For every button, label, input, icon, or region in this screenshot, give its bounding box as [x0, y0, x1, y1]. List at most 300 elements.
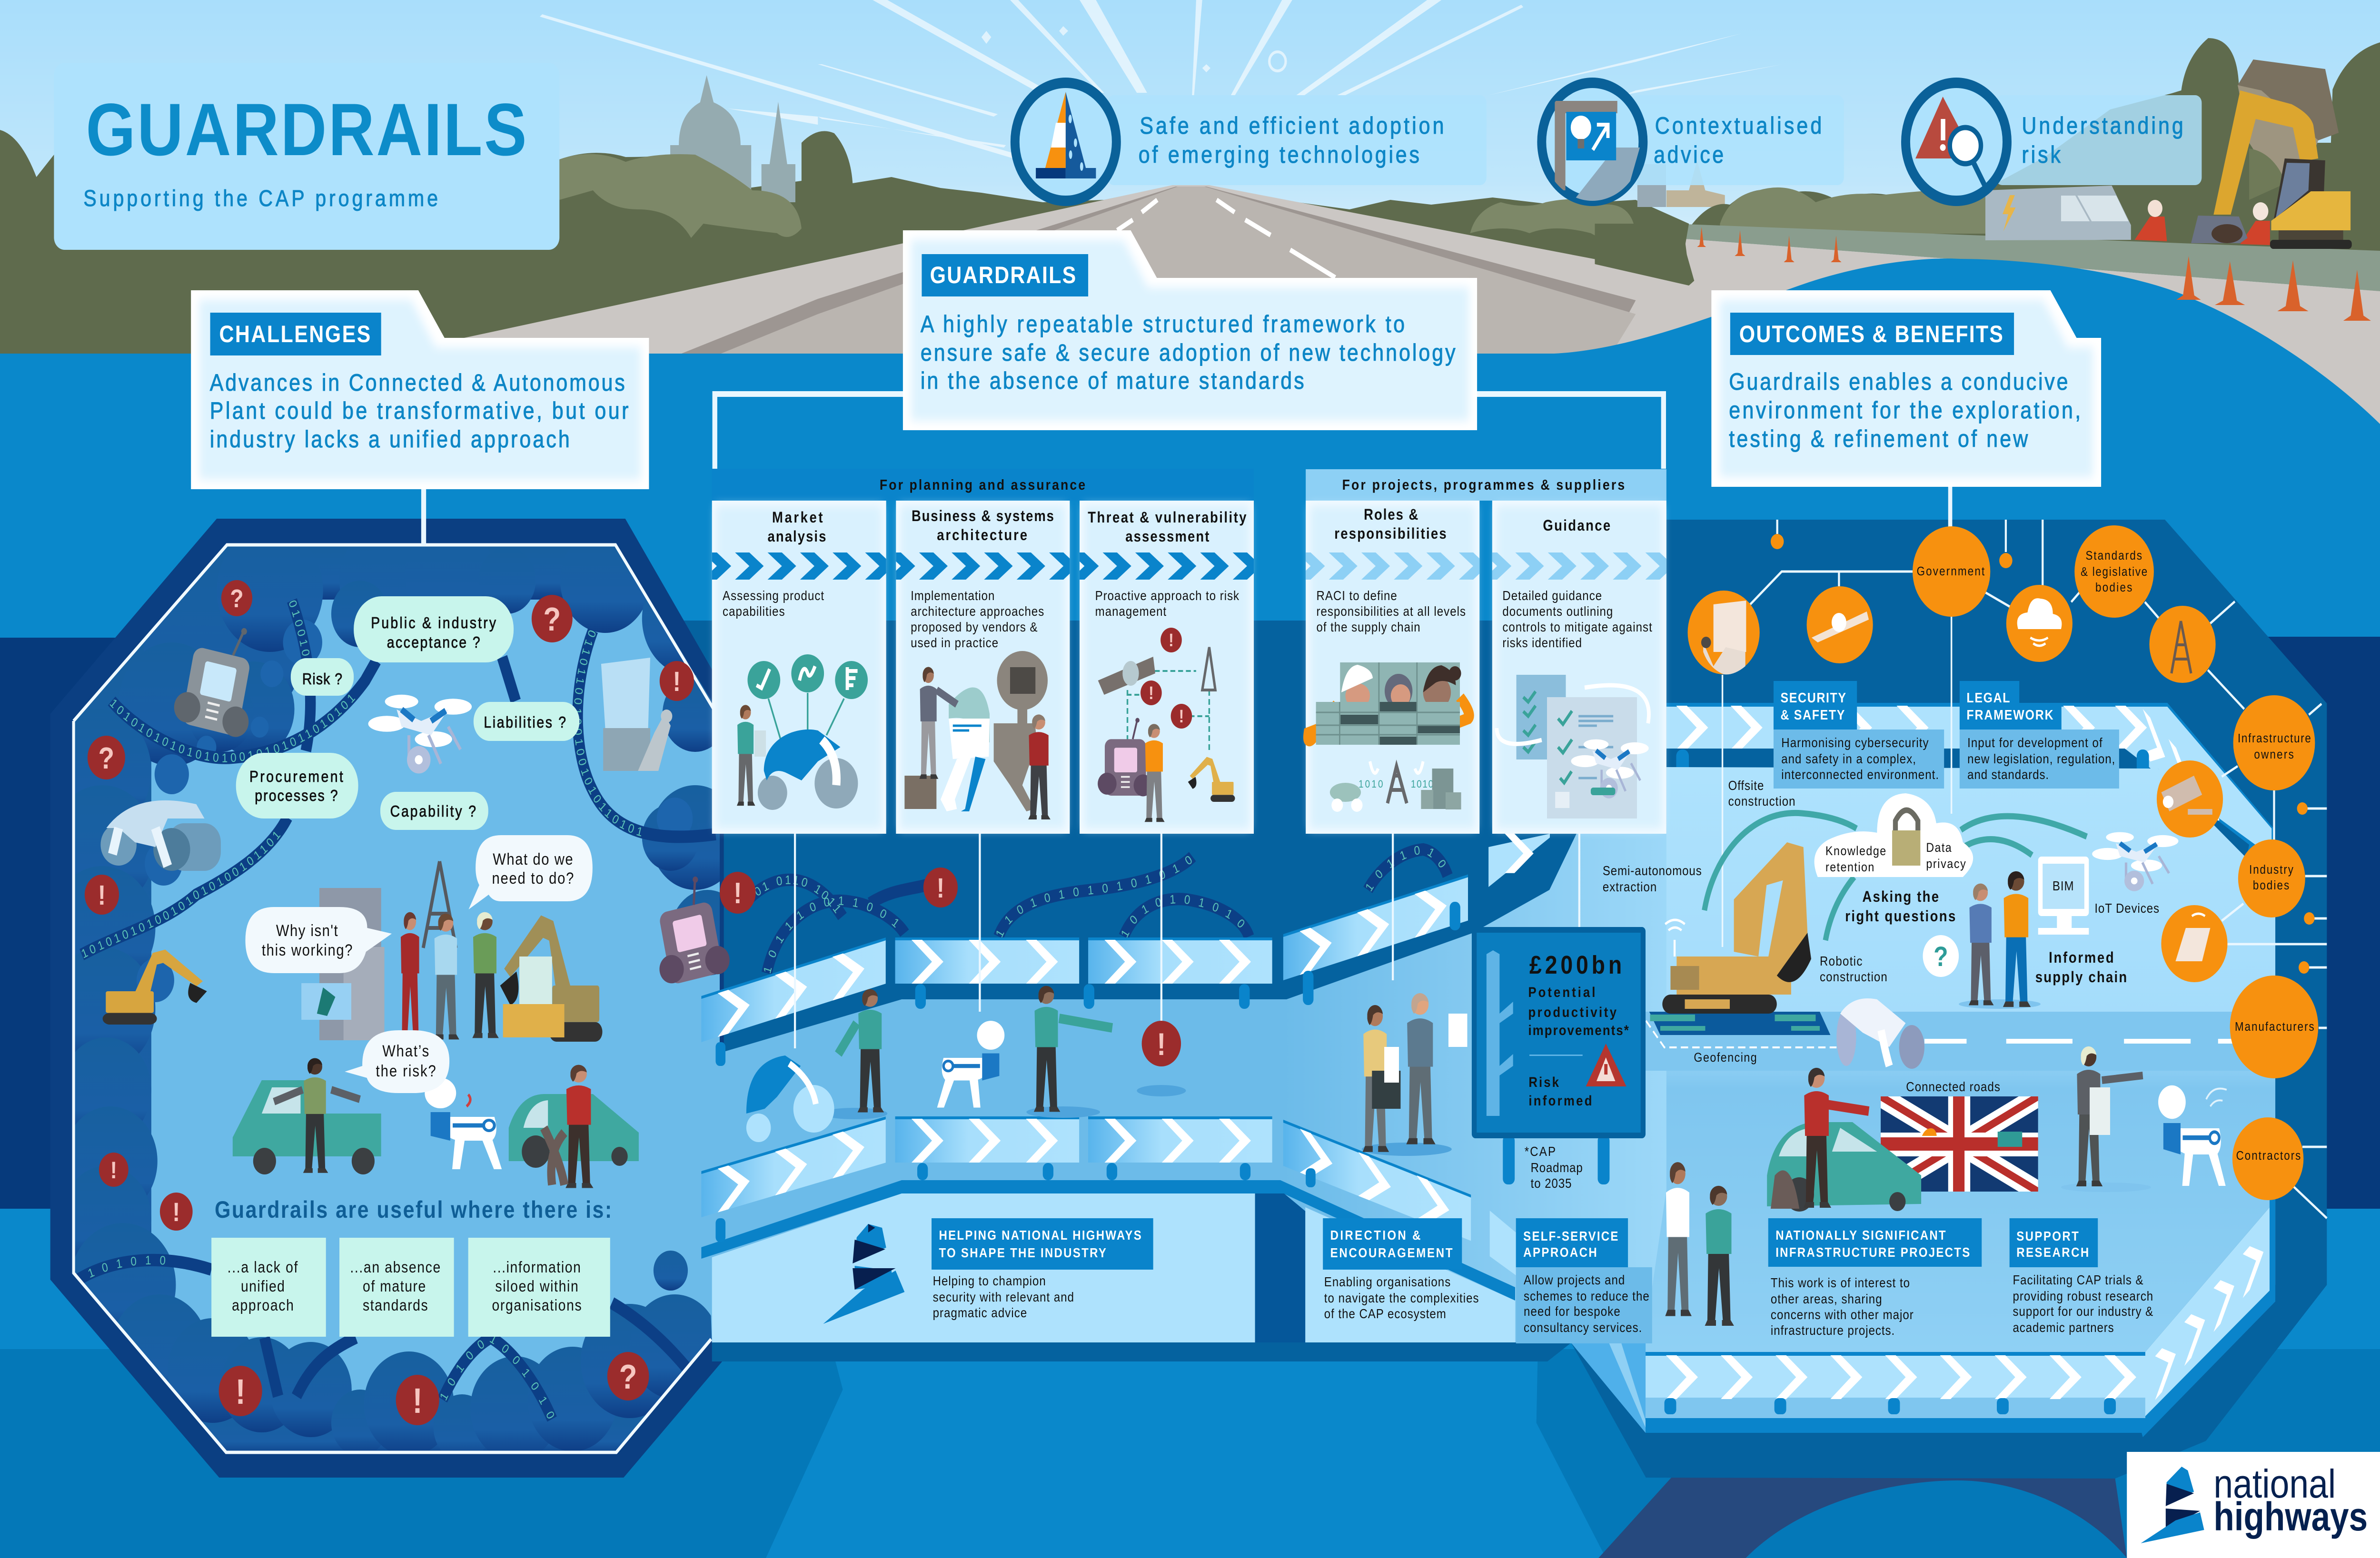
icon: question bubble: ?: [1934, 942, 1948, 972]
callout: safe and efficient adoption: Safe and efficient adoption: [1140, 112, 1444, 139]
card: market analysis: analysis: [768, 528, 826, 545]
bubble: procurement: [236, 753, 358, 818]
icon: alert centre one: [720, 872, 756, 914]
node: standards: Standards: [2085, 549, 2142, 562]
icon: alert left: !: [98, 880, 106, 911]
node: tablet: [2161, 905, 2228, 982]
text: challenges: Advances in Connected & Autonomous: [210, 369, 625, 396]
house: [2238, 59, 2339, 200]
icon: warning triangle: [1586, 1044, 1626, 1086]
cloud with padlock: Data: [1926, 840, 1952, 855]
heading: informed supply chain: [2035, 949, 2127, 986]
card: roles and responsibilities: responsibilities: [1334, 525, 1447, 542]
sign: 200bn: productivity: [1528, 1004, 1616, 1020]
label: IoT devices: IoT Devices: [2094, 900, 2159, 916]
bubble: liabilities: [474, 702, 579, 741]
speech: what do we need to do: [469, 835, 593, 909]
warning icons: [85, 580, 1186, 1425]
tag: nationally significant infrastructure projects: NATIONALLY SIGNIFICANT: [1775, 1227, 1946, 1242]
binary text: 0100100: [286, 598, 314, 671]
bubble: public acceptance: [354, 596, 514, 662]
icon: alert: [660, 661, 694, 701]
St Paul's dome: [670, 75, 795, 202]
heading: outcomes: OUTCOMES & BENEFITS: [1739, 321, 2003, 347]
node: cloud: [2006, 585, 2073, 662]
tag: legal framework: [1960, 681, 2119, 789]
illustration: RACI: [1308, 662, 1469, 812]
label: semi-autonomous extraction: [1603, 863, 1702, 894]
tag: legal framework: LEGAL: [1966, 690, 2010, 705]
node: CCTV: [2157, 760, 2223, 838]
speech: why isn't this working: this working?: [262, 941, 353, 959]
card: threat and vulnerability assessment: management: [1095, 603, 1167, 619]
text: helping: pragmatic advice: [933, 1305, 1027, 1320]
binary text: 10101010100101010100101101: [79, 826, 285, 961]
icon: alert left lower: !: [110, 1157, 117, 1183]
box: absence of mature standards: ...an absence: [350, 1258, 440, 1276]
text: CAP roadmap note: Roadmap: [1531, 1160, 1583, 1175]
illustration: centre figures: [746, 986, 1112, 1142]
octagon frame: [50, 519, 724, 1478]
bubble: capability: [380, 792, 488, 830]
lighter foliage left: [559, 154, 802, 238]
label: robotic construction: construction: [1820, 969, 1887, 984]
cones large: [2176, 256, 2371, 321]
text: challenges: [210, 369, 628, 453]
card: market analysis: [712, 501, 886, 834]
text: nationally significant: concerns with other major: [1771, 1307, 1914, 1322]
panel: direction and encouragement: to navigate the complexities: [1324, 1290, 1479, 1305]
illustration: RACI: 1010: [1359, 779, 1383, 790]
tag: helping: HELPING NATIONAL HIGHWAYS: [939, 1227, 1141, 1242]
tag: nationally significant infrastructure projects: INFRASTRUCTURE PROJECTS: [1775, 1244, 1970, 1260]
van: [1985, 186, 2131, 240]
card: roles and responsibilities: RACI to define: [1316, 588, 1397, 603]
binary text: 011011001001001010110101: [571, 628, 646, 840]
icon: question left: [88, 736, 125, 779]
card: business and systems architecture: Implementation: [911, 588, 994, 603]
panel: self-service approach: schemes to reduce the: [1524, 1288, 1649, 1303]
tag: security and safety: SECURITY: [1781, 690, 1846, 705]
panel: self-service approach: consultancy services.: [1524, 1320, 1642, 1335]
text: support research: providing robust research: [2013, 1288, 2153, 1303]
text: support research: [2013, 1272, 2153, 1335]
heading: guardrails: GUARDRAILS: [930, 262, 1076, 288]
road and shoulders: [409, 185, 2380, 457]
text: CAP roadmap note: *CAP: [1525, 1144, 1556, 1159]
icon: alert heading: !: [172, 1198, 180, 1227]
node: tower: [2149, 606, 2216, 683]
card: business and systems architecture: used in practice: [911, 635, 998, 650]
illustration: union flag: [1881, 1096, 2038, 1192]
text: guardrails: A highly repeatable structured framework to: [921, 311, 1405, 337]
card: business and systems architecture: proposed by vendors &: [911, 619, 1038, 634]
icon: alert left lower: [99, 1153, 129, 1187]
illustration: guidance documents: [1497, 675, 1649, 818]
icon: national highways mark: [823, 1224, 904, 1324]
icon: question left: ?: [99, 741, 114, 775]
title box: [54, 63, 559, 250]
card: threat and vulnerability assessment: Threat & vulnerability: [1088, 509, 1247, 526]
trees left: [0, 130, 1172, 355]
illustration: BIM screen and people: BIM: [2053, 878, 2074, 893]
icon: remote control: [171, 615, 265, 740]
tag: security and safety: Harmonising cybersecurity: [1781, 735, 1929, 750]
cloud with padlock: [1815, 793, 1973, 877]
icon: control station: [601, 658, 672, 771]
panel: self-service approach: SELF-SERVICE: [1523, 1228, 1618, 1243]
text: challenges: industry lacks a unified approach: [210, 426, 570, 453]
card: market analysis: Assessing product: [723, 588, 824, 603]
cloud with padlock: retention: [1825, 860, 1874, 874]
icon: question: ?: [230, 584, 244, 613]
node: standards: [2074, 525, 2154, 618]
roadworkers: [2135, 200, 2270, 245]
text: outcomes: Guardrails enables a conducive: [1729, 368, 2068, 395]
illustration: robot dog and woman with car: [425, 1065, 639, 1188]
icon: question bottom: ?: [619, 1358, 637, 1396]
navy side bands: [0, 637, 2380, 1209]
panel: guardrails intro: [903, 230, 1477, 430]
illustration: architecture: [904, 651, 1051, 819]
box: absence of mature standards: of mature: [363, 1277, 426, 1295]
octagon interior: [75, 546, 720, 1450]
icon: alert: !: [673, 667, 681, 697]
bubble: capability: Capability ?: [390, 802, 476, 820]
tag: legal framework: and standards.: [1967, 767, 2049, 782]
heading: asking the right questions: Asking the: [1862, 888, 1939, 906]
distant buildings: [1637, 160, 1725, 207]
bubble: risk: Risk ?: [302, 670, 342, 688]
node: infrastructure owners: [2233, 695, 2315, 790]
node: manufacturers: [2230, 976, 2318, 1078]
speech: what do we need to do: need to do?: [492, 869, 574, 887]
heading: challenges: CHALLENGES: [219, 321, 370, 347]
box: absence of mature standards: standards: [363, 1296, 428, 1314]
callout: understanding risk: Understanding: [2022, 112, 2183, 139]
callout: safe and efficient adoption: [1015, 83, 1487, 201]
speech: what's the risk: What’s: [382, 1042, 429, 1060]
heading: informed supply chain: supply chain: [2035, 969, 2127, 986]
icon: autonomous roller: [100, 800, 221, 871]
cloud with padlock: Knowledge: [1825, 844, 1886, 858]
illustration: two men talking: [1665, 1162, 1734, 1326]
card: threat and vulnerability assessment: assessment: [1125, 528, 1209, 545]
icon: alert bottom one: [219, 1366, 262, 1416]
icon: drone IoT: [2092, 832, 2178, 891]
panel: self-service approach: [1516, 1218, 1652, 1343]
icon: alert centre one: !: [734, 877, 742, 910]
panel: challenges intro: [191, 290, 649, 489]
small nodes: [1771, 534, 2315, 974]
label: connected roads: Connected roads: [1906, 1079, 2000, 1094]
illustration: woman with car: [1767, 1068, 1921, 1212]
node: infrastructure owners: Infrastructure: [2238, 731, 2311, 745]
trees right: [1689, 38, 2380, 257]
digital road: [1643, 1012, 2275, 1071]
card: market analysis: Market: [772, 509, 823, 526]
text: challenges: Plant could be transformative, but our: [210, 397, 628, 424]
text: nationally significant: This work is of interest to: [1771, 1275, 1910, 1290]
icon: drone: [368, 695, 472, 773]
text: outcomes: environment for the exploration,: [1729, 397, 2081, 424]
panel: direction and encouragement: DIRECTION &: [1330, 1227, 1421, 1242]
sign: 200bn: informed: [1528, 1093, 1592, 1108]
box: information siloed: [468, 1238, 610, 1337]
card: roles and responsibilities: responsibilities at all levels: [1316, 603, 1466, 619]
text: helping: Helping to champion: [933, 1273, 1046, 1288]
icon: risk magnifier: [1905, 83, 2007, 201]
panel: self-service approach: need for bespoke: [1524, 1303, 1620, 1319]
icon: alert heading: [160, 1193, 193, 1231]
centre dark zone: [614, 621, 1758, 1096]
speech: what's the risk: [345, 1030, 449, 1093]
card: roles and responsibilities: of the supply chain: [1316, 619, 1420, 634]
illustration: threat: !: [1169, 630, 1174, 651]
icon: small excavator: [103, 950, 207, 1025]
icon: question bottom: [607, 1352, 649, 1400]
icon: alert left: [85, 875, 119, 915]
lighter foliage centre-right: [1470, 199, 1636, 240]
panel: direction and encouragement: ENCOURAGEMENT: [1330, 1245, 1453, 1260]
white frame from guardrails panel: [715, 394, 1664, 469]
binary ribbons centre: 1 0 1 0 1 0 1 0 1 0 1 0 1: [0, 0, 1253, 940]
icon: question: [221, 580, 252, 616]
node: manufacturers: Manufacturers: [2235, 1020, 2314, 1034]
binary text: 1 1 0 1 0 1 0: [73, 1253, 169, 1288]
heading bar: For projects, programmes & suppliers: [1342, 477, 1625, 493]
bubble: procurement: processes ?: [255, 787, 338, 805]
heading: guardrails are useful: Guardrails are useful where there is:: [215, 1196, 612, 1223]
connector: challenges: [421, 485, 426, 546]
card: threat and vulnerability assessment: [1080, 501, 1254, 834]
card: roles and responsibilities: Roles &: [1364, 506, 1418, 523]
tag: security and safety: [1774, 681, 1944, 789]
heading bar: [712, 469, 1254, 501]
illustration: remote pink: [645, 872, 732, 988]
illustration: two people with papers: [1362, 993, 1467, 1156]
text: helping: [933, 1273, 1074, 1320]
card: guidance: [1492, 501, 1666, 834]
sky rays: [540, 0, 1783, 164]
text: guardrails: in the absence of mature standards: [921, 367, 1304, 394]
box: information siloed: ...information: [493, 1258, 581, 1276]
bottom arc: [1746, 1480, 2127, 1558]
label: robotic construction: Robotic: [1820, 953, 1862, 968]
icon: alert centre two: !: [937, 873, 944, 904]
heading: asking the right questions: [1845, 888, 1955, 925]
illustration: market analysis: [737, 654, 868, 810]
icon: question large: ?: [543, 601, 561, 638]
text: CAP roadmap note: [1525, 1144, 1583, 1191]
card: business and systems architecture: [896, 501, 1070, 834]
octagon white line: [74, 545, 714, 1452]
connectors from cards: [795, 834, 1579, 1048]
text: guardrails: [921, 311, 1456, 394]
logo text: [2213, 1461, 2368, 1539]
bubble: public acceptance: acceptance ?: [387, 633, 480, 651]
card: roles and responsibilities: [1306, 501, 1479, 834]
heading: asking the right questions: right questions: [1845, 908, 1955, 925]
icon: question large: [532, 595, 573, 642]
callout: contextualised advice: [1542, 83, 1844, 205]
text: outcomes: [1729, 368, 2081, 452]
panel: for projects, programmes and suppliers: [1306, 469, 1666, 834]
tag: support research: SUPPORT: [2016, 1228, 2079, 1243]
bottom dark base of outcomes zone: [1572, 1285, 2327, 1479]
box: information siloed: siloed within: [495, 1277, 578, 1295]
illustration: BIM screen and people: [1923, 857, 2089, 1009]
binary ribbons centre: 1 0 1 1 1 0 0 1 1 0 0 1: [761, 894, 903, 975]
sign: 200bn: improvements*: [1528, 1022, 1629, 1038]
illustration: autonomous vehicle: [1836, 998, 1924, 1069]
binary ribbons centre: 101 0110 1011: [745, 873, 845, 918]
bubble: public acceptance: Public & industry: [371, 614, 496, 632]
outcomes top barrier: [1666, 703, 2274, 895]
panel: helping national highways: [712, 1193, 1572, 1361]
label: robotic construction: [1820, 953, 1887, 984]
node: control screen: [1688, 591, 1760, 674]
code ribbons: [75, 601, 715, 1419]
text: guardrails: ensure safe & secure adoption of new technology: [921, 339, 1456, 366]
card: threat and vulnerability assessment: Proactive approach to risk: [1095, 588, 1240, 603]
panel: self-service approach: APPROACH: [1523, 1244, 1597, 1260]
card: guidance: controls to mitigate against: [1502, 619, 1652, 634]
card: business and systems architecture: architecture approaches: [911, 603, 1044, 619]
box: absence of mature standards: [339, 1238, 454, 1337]
orange network nodes: [1688, 525, 2318, 1200]
tag: support research: [2010, 1218, 2098, 1267]
card: business and systems architecture: Business & systems: [912, 508, 1054, 525]
panel: direction and encouragement: [1305, 1207, 1515, 1342]
label: semi-autonomous extraction: extraction: [1603, 879, 1656, 894]
bottom road wedge: [1598, 1478, 2127, 1558]
sign: 200bn: £200bn: [1529, 950, 1622, 979]
centre lit area: [701, 834, 1670, 1343]
illustration: group discussing: [301, 861, 602, 1067]
heading bar: For planning and assurance: [880, 477, 1085, 493]
subtitle: Supporting the CAP programme: [83, 186, 438, 211]
callout: safe and efficient adoption: of emerging technologies: [1139, 141, 1419, 168]
illustration: pickup and worker: [233, 1058, 381, 1174]
trees centre-right: [1298, 197, 1689, 286]
panel: outcomes intro: [1711, 290, 2101, 487]
logo mark: [2141, 1467, 2204, 1543]
node: industry bodies: [2238, 839, 2305, 917]
speech: what's the risk: the risk?: [376, 1062, 436, 1080]
text: CAP roadmap note: to 2035: [1531, 1175, 1572, 1191]
box: lack of unified approach: approach: [232, 1296, 294, 1314]
node: satellite: [1807, 586, 1873, 663]
arcs of connectivity: [1705, 813, 2087, 940]
logo text: national: [2213, 1461, 2336, 1506]
icon: alert bottom two: !: [413, 1381, 423, 1420]
label: semi-autonomous extraction: Semi-autonomous: [1603, 863, 1702, 878]
card: market analysis: capabilities: [723, 603, 785, 619]
illustration: RACI: 1010: [1411, 779, 1433, 790]
illustration: worker and robot dog: [2061, 1046, 2227, 1192]
text: support research: support for our industry &: [2013, 1303, 2153, 1319]
node: standards: & legislative: [2081, 565, 2147, 579]
logo: national highways: [2127, 1452, 2380, 1558]
binary ribbons centre: 1 1 0 1 0 1 0 1 0 1 0 1 0 1 0 1 1: [0, 0, 1197, 940]
tag: legal framework: Input for development of: [1967, 735, 2102, 750]
title: GUARDRAILS: [86, 88, 527, 171]
box: lack of unified approach: unified: [241, 1277, 285, 1295]
icon: alert road: [1137, 1021, 1186, 1096]
card: guidance: Detailed guidance: [1502, 588, 1602, 603]
text: nationally significant: [1771, 1275, 1914, 1338]
bubble: risk: [291, 658, 354, 696]
question bubbles: [236, 596, 579, 830]
heading: outcomes: [1730, 313, 2014, 355]
binary text: 1010101010101010010101011010101: [107, 689, 359, 765]
box: lack of unified approach: [211, 1238, 326, 1337]
text: helping: security with relevant and: [933, 1289, 1074, 1304]
panel: self-service approach: Allow projects and: [1524, 1272, 1625, 1287]
text: outcomes: testing & refinement of new: [1729, 425, 2028, 452]
lower barrier segments: [701, 1116, 1516, 1301]
node: standards: bodies: [2095, 581, 2132, 594]
bottom centre road shape: [766, 1361, 1606, 1558]
tag: nationally significant infrastructure projects: [1768, 1218, 1982, 1267]
illustration: threat: [1098, 628, 1235, 822]
sign: 200bn: Potential: [1528, 984, 1595, 1000]
cones small: [1697, 227, 1842, 262]
heading: challenges: [210, 313, 381, 355]
bubble: liabilities: Liabilities ?: [484, 713, 566, 731]
text: nationally significant: infrastructure projects.: [1771, 1322, 1894, 1338]
panel: direction and encouragement: Enabling organisations: [1324, 1274, 1450, 1289]
icon: question bubble: [1923, 935, 1959, 977]
node: industry bodies: bodies: [2253, 878, 2289, 892]
box: lack of unified approach: ...a lack of: [228, 1258, 298, 1276]
icon: alert bottom one: !: [236, 1372, 246, 1411]
icon: alert centre two: [923, 868, 958, 907]
card: guidance: risks identified: [1502, 635, 1582, 650]
tag: helping: [932, 1218, 1153, 1270]
binary ribbons centre: 1 0 1 1 0 1 0 1 0: [0, 0, 1453, 894]
speech: why isn't this working: Why isn't: [276, 921, 338, 940]
illustration: threat: !: [1149, 683, 1154, 703]
heading: informed supply chain: Informed: [2049, 949, 2114, 966]
bubble: procurement: Procurement: [249, 768, 343, 786]
text: support research: Facilitating CAP trials &: [2013, 1272, 2143, 1287]
outcomes shell: [1572, 520, 2327, 1479]
card: business and systems architecture: architecture: [937, 527, 1027, 544]
node: government: [1913, 526, 1990, 617]
label: offsite construction: Offsite: [1728, 778, 1764, 793]
tag: security and safety: interconnected environment.: [1781, 767, 1939, 782]
node: infrastructure owners: owners: [2254, 748, 2294, 761]
label: offsite construction: [1728, 778, 1795, 809]
geofencing pad: [1646, 1012, 1836, 1047]
card: guidance: Guidance: [1543, 517, 1610, 534]
speech: why isn't this working: [245, 907, 392, 973]
network lines: [1723, 487, 2327, 1218]
logo text: highways: [2213, 1494, 2368, 1539]
tag: legal framework: new legislation, regulation,: [1967, 751, 2115, 766]
card: guidance: documents outlining: [1502, 603, 1613, 619]
panel: challenges octagon: [50, 519, 724, 1478]
tag: helping: TO SHAPE THE INDUSTRY: [939, 1245, 1106, 1260]
sign: 200bn: [1474, 930, 1643, 1184]
tag: security and safety: & SAFETY: [1781, 707, 1844, 722]
label: offsite construction: construction: [1728, 793, 1795, 809]
label: geofencing: Geofencing: [1694, 1050, 1757, 1065]
upper barrier segments: [701, 834, 1550, 1066]
excavator top right: [2191, 90, 2352, 249]
